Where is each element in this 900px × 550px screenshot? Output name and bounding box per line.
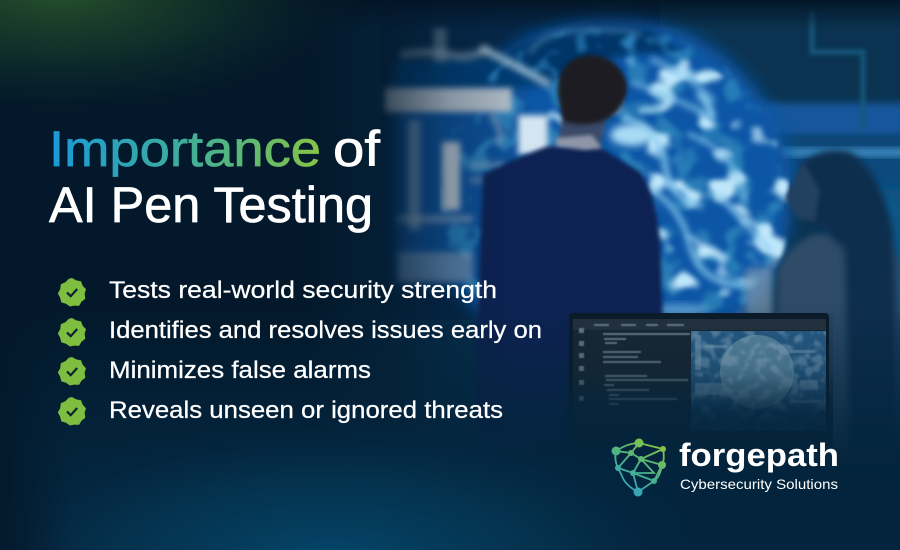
icon: check badge 1: [58, 278, 86, 306]
benefit text 3: Minimizes false alarms: [109, 357, 371, 384]
photo: person light patch: [745, 268, 773, 318]
icon: shield network: [612, 438, 666, 496]
icon: check badge 2: [58, 318, 86, 346]
benefit text 1: Tests real-world security strength: [109, 277, 497, 304]
background photo: blurred control room: [364, 5, 900, 418]
colour washes: [0, 6, 508, 426]
title: of: [333, 121, 380, 177]
laptop screen: [569, 313, 833, 436]
benefit text 4: Reveals unseen or ignored threats: [109, 397, 503, 424]
logo tagline: Cybersecurity Solutions: [680, 476, 838, 492]
logo wordmark: forgepath: [679, 437, 839, 473]
title: Importance: [49, 121, 321, 177]
title: [49, 121, 380, 233]
icon: check badge 3: [58, 357, 86, 386]
benefit list: [58, 277, 542, 426]
icon: check badge 4: [58, 397, 86, 426]
logo: forgepath: [612, 437, 839, 496]
benefit text 2: Identifies and resolves issues early on: [109, 317, 542, 344]
globe: [395, 17, 792, 373]
title: AI Pen Testing: [49, 177, 373, 233]
photo: man seen from behind: [476, 52, 666, 378]
photo: woman at right: [776, 146, 900, 428]
left circuit shapes: [385, 28, 550, 282]
